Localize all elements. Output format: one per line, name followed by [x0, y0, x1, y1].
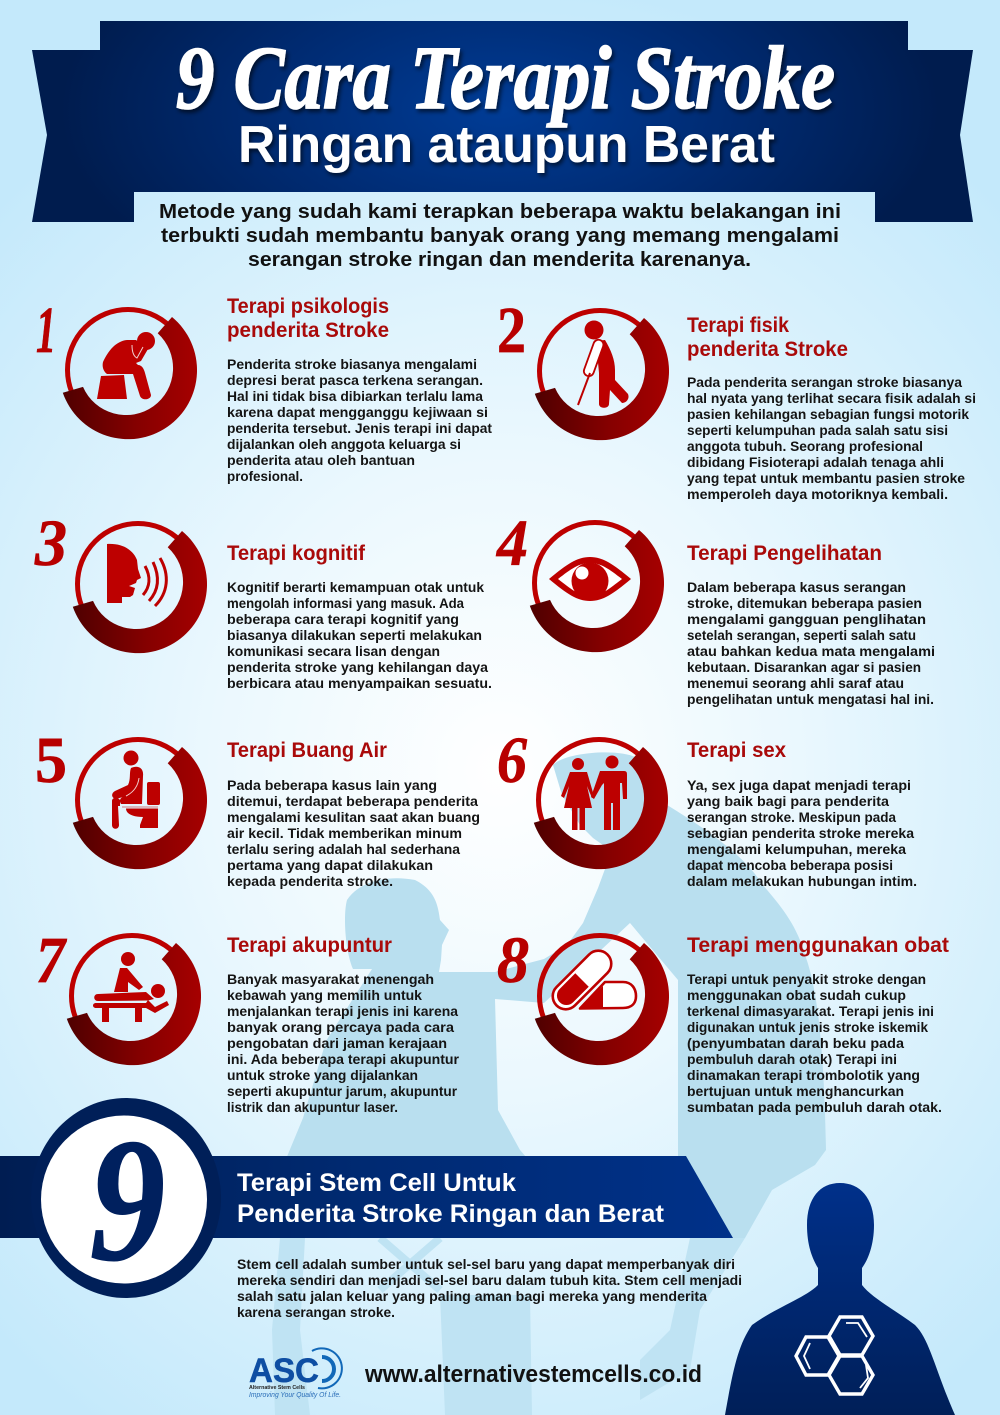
intro text: terbukti sudah membantu banyak orang yang memang mengalami	[161, 225, 839, 247]
body text: pengobatan dari jaman kerajaan	[227, 1036, 447, 1051]
body text: menemui seorang ahli saraf atau	[687, 676, 904, 691]
body text: ditemui, terdapat beberapa penderita	[227, 794, 479, 809]
body text: digunakan untuk jenis stroke iskemik	[687, 1020, 929, 1035]
body text: kepada penderita stroke.	[227, 874, 393, 889]
body text: mereka sendiri dan menjadi sel-sel baru dalam tubuh kita. Stem cell menjadi	[237, 1273, 742, 1288]
background silhouette: wheelchair patient and helper	[269, 752, 826, 1415]
body text: anggota tubuh. Seorang profesional	[687, 439, 923, 454]
human body silhouette with molecule	[725, 1183, 955, 1415]
heading: penderita Stroke	[687, 338, 848, 361]
title: Ringan ataupun Berat	[238, 116, 775, 174]
band heading: Terapi Stem Cell Untuk	[237, 1169, 516, 1197]
body text	[687, 375, 976, 502]
body text: berbicara atau menyampaikan sesuatu.	[227, 676, 492, 691]
body text: Pada penderita serangan stroke biasanya	[687, 375, 963, 390]
body text	[227, 972, 460, 1115]
body text: menggunakan obat sudah cukup	[687, 988, 906, 1003]
icon: person on toilet	[73, 740, 207, 869]
intro text	[159, 201, 841, 271]
body text: dinamakan terapi trombolotik yang	[687, 1068, 920, 1083]
body text: serangan stroke. Meskipun pada	[687, 810, 897, 825]
panel: 2 terapi fisik	[497, 294, 976, 502]
panel: 7 terapi akupuntur	[36, 924, 460, 1115]
body text: mengalami kesulitan saat akan buang	[227, 810, 480, 825]
number 2: 2	[497, 294, 526, 367]
panel: 3 terapi kognitif	[34, 507, 492, 691]
body text: Hal ini tidak bisa dibiarkan terlalu lama	[227, 389, 484, 404]
title	[176, 29, 835, 174]
heading: Terapi akupuntur	[227, 934, 392, 957]
icon: massage table	[67, 936, 201, 1065]
body text: menjalankan terapi jenis ini karena	[227, 1004, 459, 1019]
body text: memperoleh daya motoriknya kembali.	[687, 487, 948, 502]
body text: Ya, sex juga dapat menjadi terapi	[687, 778, 911, 793]
panel: 6 terapi sex	[497, 724, 917, 889]
body text: terkenal dimasyarakat. Terapi jenis ini	[687, 1004, 934, 1019]
panel: 8 terapi menggunakan obat	[497, 924, 949, 1115]
number 9 badge: 9	[90, 1103, 165, 1298]
heading: penderita Stroke	[227, 319, 389, 342]
body text: salah satu jalan keluar yang paling aman bagi mereka yang menderita	[237, 1289, 708, 1304]
intro text: serangan stroke ringan dan menderita karenanya.	[248, 249, 751, 271]
body text: Penderita stroke biasanya mengalami	[227, 357, 477, 372]
body text: mengolah informasi yang masuk. Ada	[227, 596, 465, 611]
number 9 badge	[31, 1098, 221, 1298]
icon: person with crutch	[535, 310, 669, 440]
body text	[687, 580, 935, 707]
intro text: Metode yang sudah kami terapkan beberapa waktu belakangan ini	[159, 201, 841, 223]
body text: terlalu sering adalah hal sederhana	[227, 842, 461, 857]
heading: Terapi Buang Air	[227, 739, 387, 762]
band heading	[237, 1169, 665, 1228]
body text: listrik dan akupuntur laser.	[227, 1100, 398, 1115]
icon: eye	[530, 522, 664, 652]
body text: bertujuan untuk menghancurkan	[687, 1084, 904, 1099]
body text: stroke, ditemukan beberapa pasien	[687, 596, 922, 611]
body text: (penyumbatan darah beku pada	[687, 1036, 905, 1051]
panel: 4 terapi pengelihatan	[495, 507, 935, 707]
body text: yang tepat untuk membantu pasien stroke	[687, 471, 965, 486]
body text: kebawah yang memilih untuk	[227, 988, 423, 1003]
body text: komunikasi secara lisan dengan	[227, 644, 440, 659]
body text: hal nyata yang terlihat secara fisik adalah si	[687, 391, 976, 406]
body text: untuk stroke yang dijalankan	[227, 1068, 418, 1083]
number 5: 5	[35, 724, 67, 797]
logo: ASC: Alternative Stem Cells	[249, 1385, 305, 1391]
body text: atau bahkan kedua mata mengalami	[687, 644, 935, 659]
body text: dijalankan oleh anggota keluarga si	[227, 437, 461, 452]
panel: 5 terapi buang air	[35, 724, 480, 889]
heading: Terapi menggunakan obat	[687, 934, 949, 957]
body text: seperti kelumpuhan pada salah satu sisi	[687, 423, 948, 438]
body text: dibidang Fisioterapi adalah tenaga ahli	[687, 455, 944, 470]
logo: ASC	[249, 1348, 342, 1399]
body text: depresi berat pasca terkena serangan.	[227, 373, 483, 388]
body text: air kecil. Tidak memberikan minum	[227, 826, 462, 841]
number 1: 1	[36, 294, 56, 367]
body text: biasanya dilakukan seperti melakukan	[227, 628, 482, 643]
body text	[227, 357, 493, 484]
body text: karena dapat mengganggu kejiwaan si	[227, 405, 488, 420]
body text: profesional.	[227, 469, 303, 484]
body text: Banyak masyarakat menengah	[227, 972, 434, 987]
icon: couple holding hands	[534, 740, 668, 869]
icon: capsule and pill	[535, 936, 669, 1065]
band heading: Penderita Stroke Ringan dan Berat	[237, 1200, 665, 1228]
website url: www.alternativestemcells.co.id	[364, 1361, 702, 1388]
body text	[687, 778, 917, 889]
heading	[687, 314, 848, 361]
body text: Stem cell adalah sumber untuk sel-sel baru yang dapat memperbanyak diri	[237, 1257, 735, 1272]
body text: sumbatan pada pembuluh darah otak.	[687, 1100, 942, 1115]
body text: dapat mencoba beberapa posisi	[687, 858, 893, 873]
body text: dalam melakukan hubungan intim.	[687, 874, 917, 889]
body text: pengelihatan untuk mengatasi hal ini.	[687, 692, 934, 707]
logo: ASC: ASC	[249, 1352, 319, 1390]
body text	[227, 778, 480, 889]
logo: ASC: Improving Your Quality Of Life.	[249, 1392, 341, 1399]
body text: ini. Ada beberapa terapi akupuntur	[227, 1052, 460, 1067]
body text: mengalami gangguan penglihatan	[687, 612, 926, 627]
body text: mengalami kelumpuhan, mereka	[687, 842, 907, 857]
body text: penderita atau oleh bantuan	[227, 453, 415, 468]
body text	[687, 972, 942, 1115]
molecule icon	[796, 1317, 873, 1394]
heading: Terapi Pengelihatan	[687, 542, 882, 565]
heading: Terapi psikologis	[227, 295, 389, 318]
ribbon band	[0, 1156, 733, 1238]
body text: Kognitif berarti kemampuan otak untuk	[227, 580, 485, 595]
number 6: 6	[497, 724, 527, 797]
body text	[237, 1257, 742, 1320]
body text: pembuluh darah otak) Terapi ini	[687, 1052, 897, 1067]
body text: banyak orang percaya pada cara	[227, 1020, 455, 1035]
heading: Terapi fisik	[687, 314, 789, 337]
body text: pasien kehilangan sebagian fungsi motorik	[687, 407, 970, 422]
number 8: 8	[497, 924, 529, 997]
body text: kebutaan. Disarankan agar si pasien	[687, 660, 921, 675]
number 7: 7	[36, 924, 68, 997]
body text: seperti akupuntur jarum, akupuntur	[227, 1084, 458, 1099]
panel: 9 stem cell band	[0, 1098, 742, 1320]
icon: speaking head	[73, 524, 207, 653]
heading: Terapi sex	[687, 739, 786, 762]
icon: person with head in hands	[63, 310, 197, 439]
body text: pertama yang dapat dilakukan	[227, 858, 433, 873]
body text	[227, 580, 492, 691]
header banner	[32, 21, 973, 222]
title: 9 Cara Terapi Stroke	[176, 29, 835, 128]
body text: karena serangan stroke.	[237, 1305, 395, 1320]
number 4: 4	[495, 507, 528, 580]
body text: Pada beberapa kasus lain yang	[227, 778, 437, 793]
body text: sebagian penderita stroke mereka	[687, 826, 915, 841]
body text: yang baik bagi para penderita	[687, 794, 890, 809]
body text: beberapa cara terapi kognitif yang	[227, 612, 459, 627]
heading: Terapi kognitif	[227, 542, 366, 565]
body text: Dalam beberapa kasus serangan	[687, 580, 906, 595]
body text: Terapi untuk penyakit stroke dengan	[687, 972, 926, 987]
heading	[227, 295, 389, 342]
panel: 1 terapi psikologis	[36, 294, 493, 484]
body text: setelah serangan, seperti salah satu	[687, 628, 916, 643]
lower wheelchair and legs	[272, 1238, 745, 1415]
body text: penderita stroke yang kehilangan daya	[227, 660, 489, 675]
number 3: 3	[34, 507, 67, 580]
body text: penderita tersebut. Jenis terapi ini dapat	[227, 421, 493, 436]
